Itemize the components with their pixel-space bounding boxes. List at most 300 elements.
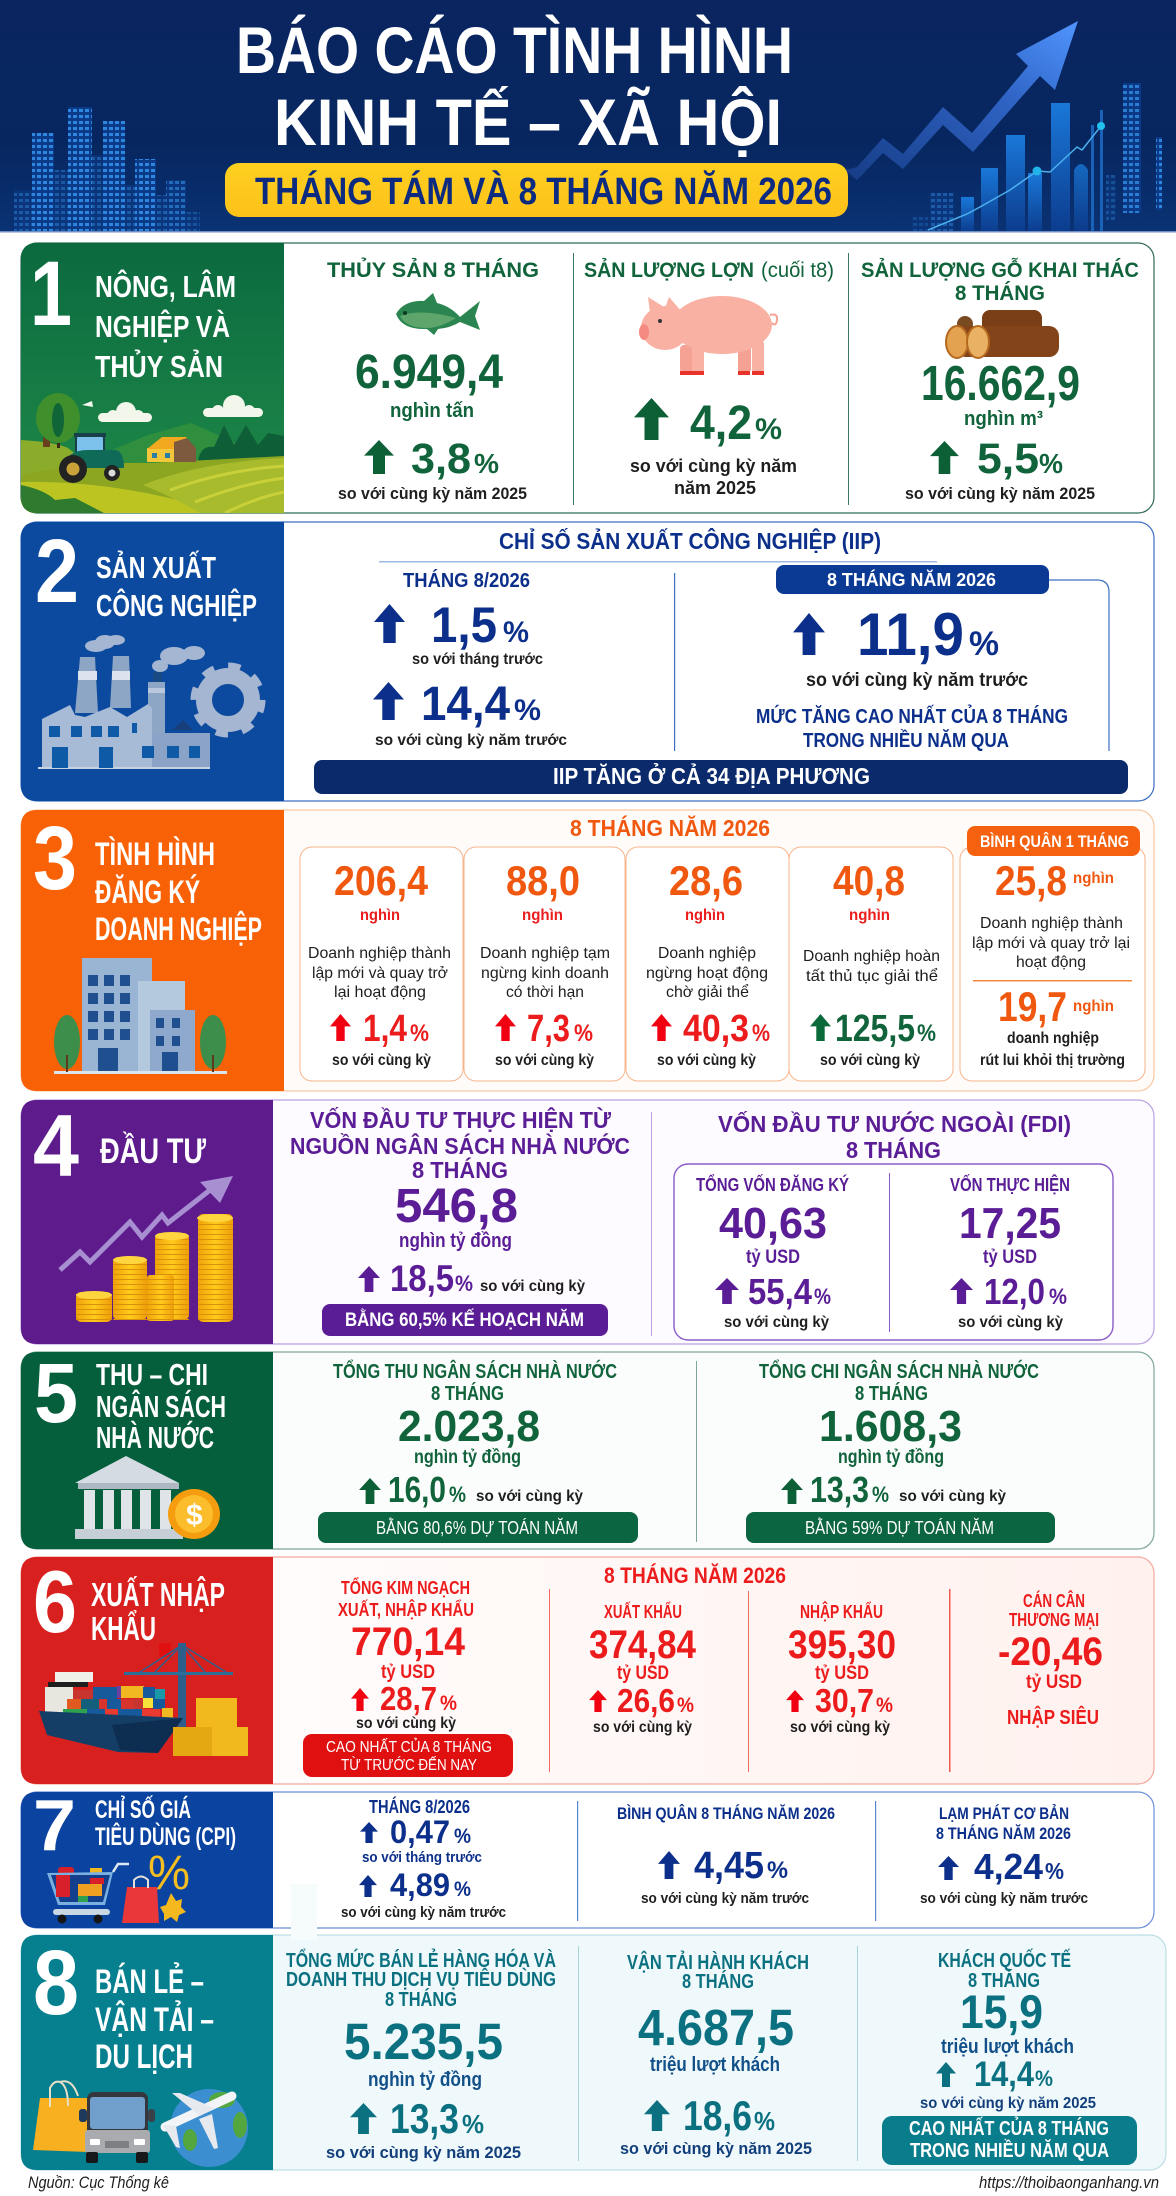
heading: 8 tháng năm 2026: 8 THÁNG NĂM 2026 bbox=[570, 814, 770, 841]
card: ngừng hoạt động: 28,6 bbox=[669, 857, 743, 904]
FDI: tổng vốn đăng ký: TỔNG VỐN ĐĂNG KÝ bbox=[696, 1174, 849, 1195]
left tab 5 bbox=[21, 1346, 273, 1549]
metric: tổng kim ngạch: TỔNG KIM NGẠCH bbox=[341, 1577, 470, 1598]
icon: bank with coin bbox=[75, 1456, 220, 1539]
card: thành lập mới bbox=[300, 847, 463, 1081]
metric: cán cân thương mại: NHẬP SIÊU bbox=[1007, 1705, 1099, 1729]
tree bbox=[36, 393, 80, 448]
heading: 8 tháng năm 2026: 8 THÁNG NĂM 2026 bbox=[604, 1563, 786, 1588]
card: bình quân 1 tháng: lập mới và quay trở lại bbox=[972, 935, 1130, 952]
panel 7: CPI bbox=[21, 1786, 1154, 1928]
card: bình quân 1 tháng: Doanh nghiệp thành bbox=[980, 915, 1123, 932]
icon: pig bbox=[639, 296, 777, 375]
card: thành lập mới: 1,4 bbox=[363, 1008, 407, 1050]
metric: sản lượng lợn: % bbox=[755, 413, 782, 446]
card: thành lập mới: % bbox=[410, 1020, 429, 1047]
icon: bag bus plane globe bbox=[33, 2081, 248, 2167]
FDI: tổng vốn đăng ký bbox=[696, 1174, 849, 1331]
metric: nhập khẩu: tỷ USD bbox=[815, 1663, 869, 1684]
left tab 8 bbox=[21, 1932, 273, 2170]
metric: cán cân thương mại: -20,46 bbox=[998, 1630, 1103, 1674]
pill: dự toán thu: BẰNG 80,6% DỰ TOÁN NĂM bbox=[376, 1517, 578, 1538]
metric: tổng kim ngạch bbox=[303, 1577, 513, 1777]
card: giải thể: nghìn bbox=[849, 907, 890, 924]
cloud bbox=[98, 402, 152, 422]
icon: coins and rising arrow bbox=[60, 1176, 233, 1322]
metric: gỗ khai thác: % bbox=[1039, 448, 1063, 479]
metric: vốn NSNN: 18,5 bbox=[390, 1258, 454, 1299]
section number 6: 6 bbox=[33, 1552, 77, 1651]
card: giải thể: so với cùng kỳ bbox=[820, 1052, 920, 1069]
section number 1: 1 bbox=[30, 243, 72, 345]
metric: 8 tháng năm 2026: so với cùng kỳ năm trước bbox=[806, 670, 1028, 691]
card: tạm ngừng bbox=[464, 847, 625, 1081]
arrow up bbox=[781, 1478, 803, 1504]
metric: vốn NSNN: VỐN ĐẦU TƯ THỰC HIỆN TỪ bbox=[310, 1106, 612, 1133]
section heading 6 bbox=[91, 1576, 225, 1647]
metric: sản lượng lợn bbox=[584, 259, 834, 498]
metric: vốn NSNN: % bbox=[455, 1271, 473, 1296]
metric: xuất khẩu: 26,6 bbox=[617, 1682, 675, 1719]
metric: bán lẻ: % bbox=[462, 2109, 484, 2139]
FDI: vốn thực hiện: 12,0 bbox=[984, 1271, 1045, 1312]
metric: vốn NSNN bbox=[290, 1106, 630, 1336]
section number 5: 5 bbox=[34, 1346, 78, 1440]
card: giải thể bbox=[789, 847, 953, 1081]
card: ngừng hoạt động bbox=[626, 847, 789, 1081]
metric: sản lượng lợn: (cuối t8) bbox=[761, 259, 834, 282]
metric: tổng kim ngạch: 770,14 bbox=[351, 1620, 466, 1664]
panel 3: đăng ký doanh nghiệp bbox=[21, 809, 1154, 1091]
metric: thủy sản: % bbox=[474, 448, 499, 479]
card: bình quân 1 tháng bbox=[960, 826, 1145, 1081]
metric: tháng 8/2026: THÁNG 8/2026 bbox=[403, 569, 530, 592]
section heading 7: CHỈ SỐ GIÁ bbox=[95, 1794, 191, 1824]
metric: vận tải hành khách: triệu lượt khách bbox=[650, 2054, 780, 2076]
card: thành lập mới: nghìn bbox=[360, 907, 400, 924]
arrow up bbox=[351, 1688, 369, 1711]
arrow up bbox=[651, 1014, 672, 1041]
arrow up bbox=[359, 1875, 377, 1897]
metric: bán lẻ: TỔNG MỨC BÁN LẺ HÀNG HÓA VÀ bbox=[286, 1948, 556, 1972]
metric: khách quốc tế: 8 THÁNG bbox=[968, 1969, 1040, 1992]
card: ngừng hoạt động: % bbox=[752, 1020, 770, 1047]
metric: tổng thu bbox=[318, 1359, 638, 1543]
section heading 5: NHÀ NƯỚC bbox=[96, 1419, 214, 1455]
metric: bán lẻ: so với cùng kỳ năm 2025 bbox=[326, 2143, 521, 2162]
metric: nhập khẩu: NHẬP KHẨU bbox=[800, 1601, 883, 1622]
FDI: vốn thực hiện: tỷ USD bbox=[983, 1247, 1037, 1268]
metric: bán lẻ: 5.235,5 bbox=[344, 2013, 503, 2070]
card: tạm ngừng: có thời hạn bbox=[506, 984, 584, 1001]
metric: nhập khẩu: so với cùng kỳ bbox=[790, 1719, 890, 1736]
section heading 5 bbox=[96, 1357, 226, 1455]
metric: vận tải hành khách bbox=[620, 1950, 812, 2158]
metric: tổng thu: TỔNG THU NGÂN SÁCH NHÀ NƯỚC bbox=[333, 1359, 617, 1383]
metric: tổng thu: 16,0 bbox=[388, 1469, 446, 1510]
metric: tổng thu: so với cùng kỳ bbox=[476, 1488, 583, 1505]
metric: tháng 8/2026: 1,5 bbox=[431, 597, 497, 653]
metric: tháng 8/2026: % bbox=[454, 1878, 471, 1901]
metric: FDI: 8 THÁNG bbox=[846, 1136, 941, 1163]
metric: khách quốc tế: so với cùng kỳ năm 2025 bbox=[920, 2095, 1096, 2112]
metric: tổng thu: nghìn tỷ đồng bbox=[414, 1447, 521, 1468]
metric: vận tải hành khách: VẬN TẢI HÀNH KHÁCH bbox=[627, 1950, 809, 1974]
arrow up bbox=[359, 1478, 381, 1504]
arrow up bbox=[715, 1278, 739, 1304]
icon: farm with tractor bbox=[21, 393, 284, 513]
section number 8: 8 bbox=[33, 1932, 79, 2034]
metric: bán lẻ: nghìn tỷ đồng bbox=[368, 2069, 482, 2091]
section number 7: 7 bbox=[33, 1786, 76, 1866]
section heading 8 bbox=[95, 1963, 214, 2076]
banner: IIP tăng bbox=[314, 760, 1128, 794]
skyline left bbox=[14, 107, 200, 232]
card: giải thể: Doanh nghiệp hoàn bbox=[803, 948, 940, 965]
metric: tổng kim ngạch: % bbox=[440, 1692, 457, 1715]
arrow up bbox=[936, 2062, 956, 2087]
metric: cán cân thương mại: tỷ USD bbox=[1026, 1672, 1082, 1693]
arrow up bbox=[374, 604, 405, 643]
panel 1: nông lâm thủy sản bbox=[21, 243, 1154, 513]
card: bình quân 1 tháng: nghìn bbox=[1073, 870, 1114, 887]
card: ngừng hoạt động: chờ giải thể bbox=[666, 983, 749, 1001]
arrow up bbox=[634, 398, 669, 440]
icon: fish bbox=[396, 293, 480, 335]
left tab 4 bbox=[21, 1096, 273, 1344]
FDI: vốn thực hiện bbox=[950, 1174, 1070, 1331]
card: tạm ngừng: so với cùng kỳ bbox=[495, 1052, 594, 1069]
card: thành lập mới: so với cùng kỳ bbox=[332, 1052, 431, 1069]
metric: FDI: VỐN ĐẦU TƯ NƯỚC NGOÀI (FDI) bbox=[718, 1110, 1071, 1137]
metric: cán cân thương mại: THƯƠNG MẠI bbox=[1009, 1610, 1099, 1630]
section heading 7: TIÊU DÙNG (CPI) bbox=[95, 1821, 236, 1851]
pill: dự toán chi bbox=[746, 1512, 1055, 1543]
section heading 3: DOANH NGHIỆP bbox=[95, 911, 262, 947]
metric: sản lượng lợn: so với cùng kỳ năm bbox=[630, 456, 797, 476]
IIP heading: CHỈ SỐ SẢN XUẤT CÔNG NGHIỆP (IIP) bbox=[499, 526, 881, 554]
card: ngừng hoạt động: 40,3 bbox=[683, 1008, 749, 1050]
metric: cán cân thương mại bbox=[998, 1590, 1103, 1729]
metric: 8 tháng năm 2026: TRONG NHIỀU NĂM QUA bbox=[803, 729, 1009, 752]
section heading 5: NGÂN SÁCH bbox=[96, 1388, 226, 1424]
metric: gỗ khai thác bbox=[861, 258, 1139, 503]
section number 3: 3 bbox=[33, 809, 77, 909]
header banner bbox=[0, 0, 1176, 232]
title bbox=[236, 13, 793, 159]
metric: 8 tháng năm 2026: % bbox=[969, 625, 999, 663]
arrow up bbox=[810, 1014, 831, 1041]
arrow up bbox=[495, 1014, 516, 1041]
metric: vận tải hành khách: 4.687,5 bbox=[638, 1999, 794, 2056]
section heading 3: ĐĂNG KÝ bbox=[95, 874, 200, 910]
metric: bình quân 8 tháng bbox=[617, 1804, 835, 1907]
card: thành lập mới: 206,4 bbox=[334, 857, 429, 904]
metric: xuất khẩu: % bbox=[677, 1694, 694, 1717]
arrow up bbox=[938, 1856, 959, 1880]
arrow up bbox=[589, 1690, 607, 1712]
card: tạm ngừng: nghìn bbox=[522, 907, 563, 924]
section heading 6: XUẤT NHẬP bbox=[91, 1576, 225, 1613]
metric: tổng thu: 8 THÁNG bbox=[431, 1382, 504, 1405]
panel 5: thu chi ngân sách bbox=[21, 1346, 1154, 1549]
metric: khách quốc tế: 15,9 bbox=[960, 1985, 1043, 2038]
metric: vận tải hành khách: 8 THÁNG bbox=[682, 1970, 754, 1993]
metric: gỗ khai thác: 5,5 bbox=[977, 435, 1039, 483]
title: BÁO CÁO TÌNH HÌNH bbox=[236, 13, 793, 87]
icon: logs bbox=[946, 310, 1059, 358]
period pill bbox=[776, 565, 1049, 594]
badge bbox=[967, 826, 1140, 856]
FDI: tổng vốn đăng ký: tỷ USD bbox=[746, 1247, 800, 1268]
banner: IIP tăng: IIP TĂNG Ở CẢ 34 ĐỊA PHƯƠNG bbox=[553, 761, 870, 789]
section heading 7 bbox=[95, 1794, 236, 1851]
metric: tháng 8/2026: % bbox=[514, 694, 541, 727]
metric: xuất khẩu bbox=[589, 1601, 697, 1736]
left tab 2 bbox=[21, 522, 284, 801]
section heading 3: TÌNH HÌNH bbox=[95, 836, 215, 872]
metric: lạm phát cơ bản: LẠM PHÁT CƠ BẢN bbox=[939, 1804, 1069, 1823]
panel 2: sản xuất công nghiệp bbox=[21, 522, 1154, 801]
metric: vốn NSNN: NGUỒN NGÂN SÁCH NHÀ NƯỚC bbox=[290, 1132, 630, 1159]
metric: bình quân 8 tháng: % bbox=[767, 1857, 788, 1884]
pill: kế hoạch năm bbox=[322, 1304, 608, 1336]
metric: thủy sản: THỦY SẢN 8 THÁNG bbox=[327, 258, 539, 282]
metric: khách quốc tế: % bbox=[1035, 2066, 1053, 2091]
metric: tổng chi: 8 THÁNG bbox=[855, 1382, 928, 1405]
metric: sản lượng lợn: 4,2 bbox=[690, 397, 752, 450]
badge: BÌNH QUÂN 1 THÁNG bbox=[980, 832, 1129, 851]
arrow up bbox=[350, 2103, 377, 2134]
FDI: vốn thực hiện: % bbox=[1049, 1284, 1067, 1309]
left tab 7 bbox=[21, 1786, 273, 1928]
arrow up bbox=[950, 1278, 973, 1304]
metric: bình quân 8 tháng: 4,45 bbox=[694, 1845, 764, 1887]
section heading 1: NÔNG, LÂM bbox=[95, 268, 236, 304]
arrow up bbox=[373, 682, 404, 720]
metric: tổng kim ngạch: so với cùng kỳ bbox=[356, 1715, 456, 1732]
metric: xuất khẩu: XUẤT KHẨU bbox=[604, 1601, 682, 1622]
house bbox=[147, 437, 196, 462]
metric: tháng 8/2026: % bbox=[454, 1825, 471, 1848]
metric: bán lẻ: DOANH THU DỊCH VỤ TIÊU DÙNG bbox=[286, 1967, 556, 1991]
FDI: vốn thực hiện: VỐN THỰC HIỆN bbox=[950, 1174, 1070, 1195]
FDI: tổng vốn đăng ký: 55,4 bbox=[748, 1271, 812, 1312]
rising arrow bbox=[845, 21, 1078, 180]
icon: factory bbox=[38, 635, 261, 769]
bird bbox=[82, 401, 93, 407]
card: giải thể: 125,5 bbox=[835, 1008, 915, 1050]
arrow up bbox=[658, 1851, 680, 1879]
card: bình quân 1 tháng: 25,8 bbox=[995, 857, 1067, 904]
metric: gỗ khai thác: nghìn m³ bbox=[964, 408, 1043, 430]
FDI: tổng vốn đăng ký: % bbox=[814, 1284, 831, 1309]
metric: khách quốc tế bbox=[882, 1948, 1137, 2165]
metric: FDI bbox=[674, 1110, 1113, 1340]
left tab 3 bbox=[21, 809, 284, 1091]
metric: khách quốc tế: KHÁCH QUỐC TẾ bbox=[938, 1948, 1071, 1972]
metric: bán lẻ bbox=[286, 1948, 556, 2162]
metric: vận tải hành khách: so với cùng kỳ năm 2025 bbox=[620, 2139, 812, 2158]
card: tạm ngừng: % bbox=[574, 1020, 593, 1047]
pill: dự toán thu bbox=[318, 1512, 638, 1543]
metric: khách quốc tế: 14,4 bbox=[974, 2055, 1034, 2094]
icon: cargo ship and crane bbox=[39, 1643, 248, 1756]
metric: 8 tháng năm 2026: MỨC TĂNG CAO NHẤT CỦA 8 THÁNG bbox=[756, 704, 1068, 728]
card: tạm ngừng: 88,0 bbox=[506, 857, 580, 904]
metric: vốn NSNN: 546,8 bbox=[395, 1180, 518, 1233]
metric: tổng chi: so với cùng kỳ bbox=[899, 1488, 1006, 1505]
card: bình quân 1 tháng: 19,7 bbox=[998, 983, 1067, 1030]
metric: thủy sản: nghìn tấn bbox=[390, 400, 474, 422]
arrow up bbox=[793, 613, 825, 655]
metric: gỗ khai thác: 8 THÁNG bbox=[955, 282, 1045, 305]
metric: 8 tháng năm 2026 bbox=[756, 565, 1109, 752]
metric: bán lẻ: 8 THÁNG bbox=[385, 1988, 457, 2011]
section number 4: 4 bbox=[33, 1096, 79, 1195]
metric: tháng 8/2026 bbox=[341, 1796, 506, 1921]
metric: tổng kim ngạch: 28,7 bbox=[380, 1680, 437, 1717]
metric: nhập khẩu bbox=[786, 1601, 896, 1736]
metric: tháng 8/2026: 4,89 bbox=[390, 1867, 450, 1903]
arrow up bbox=[358, 1266, 380, 1292]
arrow up bbox=[644, 2100, 670, 2131]
card: bình quân 1 tháng: doanh nghiệp bbox=[1007, 1030, 1099, 1047]
metric: xuất khẩu: tỷ USD bbox=[617, 1663, 669, 1684]
pill: cao nhất bbox=[882, 2116, 1137, 2165]
arrow up bbox=[364, 440, 394, 474]
metric: nhập khẩu: % bbox=[876, 1694, 893, 1717]
metric: lạm phát cơ bản: 8 THÁNG NĂM 2026 bbox=[936, 1824, 1071, 1843]
metric: tổng chi: % bbox=[872, 1482, 889, 1507]
metric: sản lượng lợn: SẢN LƯỢNG LỢN bbox=[584, 259, 754, 282]
metric: gỗ khai thác: so với cùng kỳ năm 2025 bbox=[905, 484, 1095, 503]
card: ngừng hoạt động: ngừng hoạt động bbox=[646, 965, 768, 982]
pill: cao nhất bbox=[303, 1734, 513, 1777]
metric: gỗ khai thác: SẢN LƯỢNG GỖ KHAI THÁC bbox=[861, 258, 1139, 282]
metric: thủy sản: 3,8 bbox=[411, 435, 471, 483]
metric: thủy sản: so với cùng kỳ năm 2025 bbox=[338, 484, 527, 503]
metric: tháng 8/2026 bbox=[373, 569, 567, 749]
section heading 2 bbox=[96, 550, 257, 623]
pill: cao nhất: CAO NHẤT CỦA 8 THÁNG bbox=[326, 1737, 492, 1756]
card: ngừng hoạt động: nghìn bbox=[685, 907, 725, 924]
metric: nhập khẩu: 30,7 bbox=[815, 1682, 874, 1719]
metric: tổng chi bbox=[746, 1359, 1055, 1543]
section heading 4: ĐẦU TƯ bbox=[100, 1131, 207, 1171]
arrow up bbox=[330, 1014, 351, 1041]
card: thành lập mới: lại hoạt động bbox=[334, 984, 426, 1001]
metric: sản lượng lợn: năm 2025 bbox=[674, 478, 756, 498]
metric: bình quân 8 tháng: so với cùng kỳ năm trước bbox=[641, 1890, 809, 1907]
card: thành lập mới: lập mới và quay trở bbox=[312, 965, 448, 982]
metric: tháng 8/2026: % bbox=[503, 616, 529, 649]
metric: tổng thu: 2.023,8 bbox=[398, 1402, 540, 1451]
metric: lạm phát cơ bản: % bbox=[1045, 1858, 1064, 1884]
section heading 1: THỦY SẢN bbox=[95, 348, 223, 384]
card: giải thể: % bbox=[917, 1020, 936, 1047]
skyline right bbox=[912, 83, 1162, 232]
metric: tháng 8/2026: so với tháng trước bbox=[362, 1849, 482, 1866]
metric: tháng 8/2026: so với tháng trước bbox=[412, 651, 543, 668]
card: ngừng hoạt động: Doanh nghiệp bbox=[658, 945, 756, 962]
metric: tổng kim ngạch: XUẤT, NHẬP KHẨU bbox=[338, 1599, 474, 1620]
pill: cao nhất: CAO NHẤT CỦA 8 THÁNG bbox=[909, 2116, 1109, 2140]
source note: Nguồn: Cục Thống kê bbox=[28, 2173, 169, 2192]
card: bình quân 1 tháng: nghìn bbox=[1073, 998, 1114, 1015]
FDI: vốn thực hiện: 17,25 bbox=[959, 1199, 1061, 1248]
FDI: vốn thực hiện: so với cùng kỳ bbox=[958, 1314, 1063, 1331]
metric: xuất khẩu: 374,84 bbox=[589, 1623, 697, 1667]
metric: tổng chi: nghìn tỷ đồng bbox=[838, 1447, 944, 1468]
icon: office buildings bbox=[54, 958, 227, 1074]
arrow up bbox=[930, 441, 959, 474]
section heading 2: SẢN XUẤT bbox=[96, 550, 216, 585]
arrow up bbox=[786, 1690, 804, 1712]
FDI: tổng vốn đăng ký: 40,63 bbox=[719, 1199, 827, 1248]
metric: thủy sản bbox=[327, 258, 539, 503]
left tab 6 bbox=[21, 1552, 273, 1784]
metric: vận tải hành khách: 18,6 bbox=[683, 2092, 752, 2139]
metric: tháng 8/2026: 14,4 bbox=[421, 678, 510, 731]
cloud bbox=[203, 395, 263, 417]
card: bình quân 1 tháng: rút lui khỏi thị trường bbox=[980, 1052, 1125, 1069]
tractor bbox=[59, 433, 124, 483]
card: bình quân 1 tháng: hoạt động bbox=[1016, 954, 1086, 971]
metric: cán cân thương mại: CÁN CÂN bbox=[1023, 1590, 1085, 1611]
card: ngừng hoạt động: so với cùng kỳ bbox=[657, 1052, 756, 1069]
metric: vốn NSNN: 8 THÁNG bbox=[412, 1156, 508, 1183]
period pill: 8 THÁNG NĂM 2026 bbox=[827, 569, 996, 590]
panel 4: đầu tư bbox=[21, 1096, 1154, 1344]
pill: cao nhất: TRONG NHIỀU NĂM QUA bbox=[910, 2139, 1109, 2162]
section heading 2: CÔNG NGHIỆP bbox=[96, 587, 257, 623]
card: giải thể: 40,8 bbox=[833, 857, 905, 904]
metric: tổng chi: 13,3 bbox=[810, 1469, 869, 1510]
metric: tháng 8/2026: 0,47 bbox=[390, 1814, 450, 1850]
icon: shopping cart with percent bbox=[47, 1847, 190, 1924]
pill: kế hoạch năm: BẰNG 60,5% KẾ HOẠCH NĂM bbox=[345, 1309, 584, 1331]
pill: cao nhất: TỪ TRƯỚC ĐẾN NAY bbox=[341, 1755, 477, 1774]
subtitle pill bbox=[225, 163, 848, 217]
section heading 5: THU – CHI bbox=[96, 1357, 208, 1392]
metric: tổng chi: TỔNG CHI NGÂN SÁCH NHÀ NƯỚC bbox=[759, 1359, 1039, 1383]
section heading 1: NGHIỆP VÀ bbox=[95, 308, 230, 344]
panel 6: xuất nhập khẩu bbox=[21, 1552, 1154, 1784]
icon: bank with coin: $ bbox=[186, 1499, 203, 1532]
metric: lạm phát cơ bản: 4,24 bbox=[974, 1846, 1043, 1887]
section heading 8: VẬN TẢI – bbox=[95, 2001, 214, 2039]
metric: lạm phát cơ bản bbox=[920, 1804, 1088, 1907]
title: KINH TẾ – XÃ HỘI bbox=[274, 85, 782, 159]
subtitle pill: THÁNG TÁM VÀ 8 THÁNG NĂM 2026 bbox=[255, 169, 832, 213]
icon: shopping cart with percent: % bbox=[148, 1847, 190, 1900]
pill: dự toán chi: BẰNG 59% DỰ TOÁN NĂM bbox=[805, 1517, 994, 1538]
card: tạm ngừng: ngừng kinh doanh bbox=[481, 965, 609, 982]
metric: tổng chi: 1.608,3 bbox=[819, 1402, 962, 1451]
metric: bình quân 8 tháng: BÌNH QUÂN 8 THÁNG NĂM 2026 bbox=[617, 1804, 835, 1823]
metric: khách quốc tế: triệu lượt khách bbox=[941, 2036, 1074, 2058]
metric: tháng 8/2026: so với cùng kỳ năm trước bbox=[375, 732, 567, 749]
metric: vận tải hành khách: % bbox=[754, 2106, 775, 2136]
left tab 1 bbox=[21, 243, 284, 513]
card: giải thể: tất thủ tục giải thể bbox=[806, 967, 938, 985]
metric: xuất khẩu: so với cùng kỳ bbox=[593, 1719, 692, 1736]
panel 8: bán lẻ vận tải du lịch bbox=[21, 1884, 1166, 2170]
section heading 1 bbox=[95, 268, 236, 384]
metric: tổng kim ngạch: tỷ USD bbox=[381, 1662, 435, 1683]
metric: 8 tháng năm 2026: 11,9 bbox=[857, 601, 964, 668]
